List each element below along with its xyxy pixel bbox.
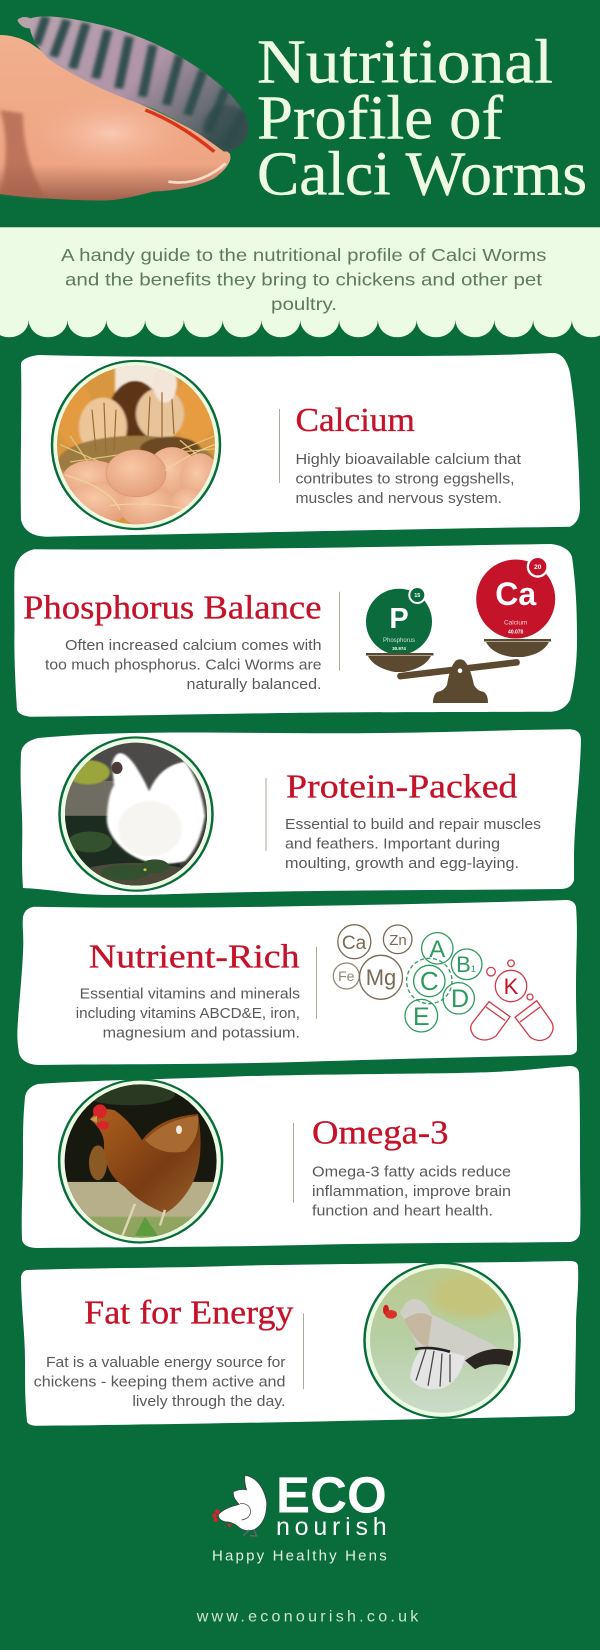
- card shape: [21, 353, 580, 537]
- body text: inflammation, improve brain: [312, 1184, 511, 1200]
- intro text: A handy guide to the nutritional profile of Calci Worms: [61, 245, 547, 265]
- body text: [45, 638, 322, 693]
- body text: [296, 452, 521, 507]
- divider: [266, 778, 267, 851]
- worm body: [17, 16, 248, 152]
- icon: capsule with vitamin K: [471, 960, 553, 1040]
- divider: [316, 947, 317, 1019]
- phosphorus element: 30.974: [392, 646, 406, 651]
- intro text: and the benefits they bring to chickens and other pet: [65, 270, 542, 290]
- card shape: [17, 900, 577, 1065]
- calcium element: 20: [534, 564, 542, 571]
- calcium element: [476, 556, 555, 638]
- icon: vitamins: [405, 933, 482, 1032]
- phosphorus element: 15: [414, 593, 420, 599]
- panel: protein-packed: [21, 729, 581, 895]
- body text: function and heart health.: [312, 1203, 493, 1219]
- intro text: poultry.: [271, 294, 337, 314]
- body text: Omega-3 fatty acids reduce: [312, 1164, 511, 1180]
- icon: minerals: [333, 925, 412, 999]
- body text: [76, 986, 300, 1042]
- panel: nutrient-rich: [17, 900, 577, 1065]
- icon: minerals: Mg: [366, 965, 396, 990]
- icon: vitamins: B1: [456, 952, 476, 977]
- scale body: [366, 639, 551, 703]
- intro band with scalloped edge: [0, 227, 600, 337]
- panel: fat for energy: [21, 1261, 578, 1426]
- tagline: Happy Healthy Hens: [212, 1548, 387, 1565]
- calcium element: Calcium: [504, 620, 527, 626]
- divider: [293, 1123, 294, 1203]
- body text: moulting, growth and egg-laying.: [285, 856, 519, 872]
- body text: Highly bioavailable calcium that: [296, 452, 521, 468]
- photo: jumping hen: [364, 1263, 520, 1418]
- icon: balance scale with elements: [366, 556, 555, 703]
- phosphorus element: Phosphorus: [383, 638, 415, 644]
- wordmark: ECO: [276, 1467, 387, 1524]
- divider: [339, 592, 340, 671]
- heading: Omega-3: [312, 1114, 448, 1151]
- icon: minerals: Zn: [389, 932, 407, 949]
- photo: white silkie hen: [60, 737, 220, 894]
- intro text: [61, 245, 547, 314]
- body text: [34, 1355, 286, 1410]
- icon: white hen: [212, 1475, 267, 1536]
- body text: too much phosphorus. Calci Worms are: [45, 658, 322, 674]
- photo: eggs in nest: [50, 357, 220, 532]
- card shape: [14, 544, 577, 717]
- title: [257, 28, 587, 208]
- icon: capsule with vitamin K: K: [504, 974, 519, 999]
- icon: vitamins: E: [413, 1003, 430, 1031]
- body text: Essential vitamins and minerals: [80, 986, 300, 1002]
- panel: phosphorus balance: [14, 544, 577, 717]
- divider: [303, 1313, 304, 1389]
- heading: Nutrient-Rich: [89, 939, 300, 976]
- body text: Fat is a valuable energy source for: [46, 1355, 286, 1371]
- body text: muscles and nervous system.: [296, 491, 502, 507]
- icon: vitamins: A: [429, 936, 445, 963]
- body text: [312, 1164, 511, 1219]
- body text: naturally balanced.: [186, 677, 322, 693]
- phosphorus element: [366, 586, 432, 655]
- panel: omega-3: [22, 1066, 580, 1248]
- body text: chickens - keeping them active and: [34, 1374, 286, 1390]
- icon: vitamins: C: [420, 966, 439, 996]
- heading: Calcium: [296, 402, 415, 439]
- heading: Fat for Energy: [84, 1294, 294, 1331]
- icon: minerals: Fe: [338, 968, 355, 984]
- body text: magnesium and potassium.: [103, 1026, 300, 1042]
- phosphorus element: P: [389, 603, 409, 635]
- title: Calci Worms: [257, 140, 587, 208]
- fingertip: [0, 35, 230, 201]
- title: Nutritional: [257, 28, 553, 96]
- logo: eco nourish: nourish: [276, 1513, 387, 1541]
- card shape: [22, 1066, 580, 1248]
- icon: vitamins: D: [451, 985, 469, 1013]
- body text: [285, 817, 541, 872]
- body text: Often increased calcium comes with: [65, 638, 322, 654]
- divider: [279, 409, 280, 483]
- body text: including vitamins ABCD&E, iron,: [76, 1006, 300, 1022]
- title: Profile of: [257, 84, 503, 152]
- photo: calci worm on fingertip: [0, 10, 260, 201]
- photo: brown hen: [59, 1080, 225, 1243]
- website url: www.econourish.co.uk: [196, 1609, 419, 1626]
- icon: minerals: Ca: [342, 933, 367, 954]
- body text: and feathers. Important during: [285, 836, 500, 852]
- heading: Protein-Packed: [286, 768, 518, 805]
- card shape: [21, 729, 581, 895]
- card shape: [21, 1261, 578, 1426]
- logo: eco nourish: [212, 1467, 387, 1565]
- heading: Phosphorus Balance: [23, 590, 322, 627]
- body text: lively through the day.: [132, 1394, 286, 1410]
- calcium element: Ca: [495, 576, 536, 612]
- body text: contributes to strong eggshells,: [296, 472, 514, 488]
- panel: calcium: [21, 353, 580, 537]
- calcium element: 40.078: [508, 630, 524, 636]
- body text: Essential to build and repair muscles: [285, 817, 541, 833]
